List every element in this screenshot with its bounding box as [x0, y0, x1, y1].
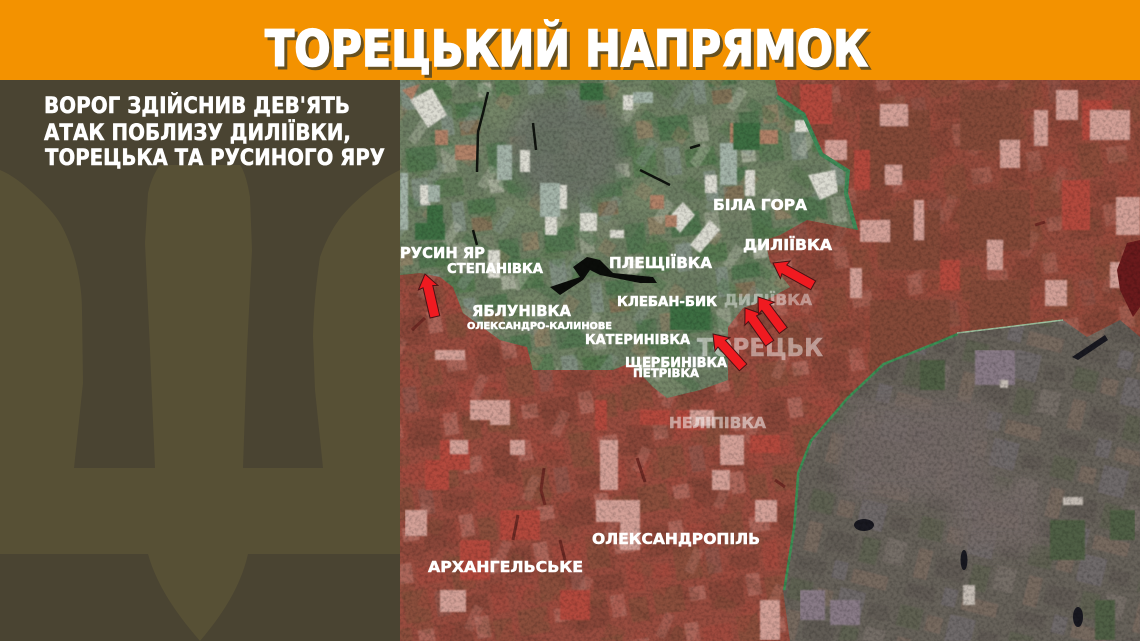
- ponds: [854, 335, 1108, 627]
- text block: attack summary: ВОРОГ ЗДІЙСНИВ ДЕВ'ЯТЬ: [44, 93, 350, 119]
- label: Petrivka: ПЕТРІВКА: [633, 366, 699, 380]
- text block: attack summary: [44, 93, 385, 171]
- arrow: toward Dyliivka: [768, 254, 818, 294]
- urban area: Kostiantynivka: [505, 93, 625, 203]
- label: Dyliivka: ДИЛІЇВКА: [743, 235, 832, 254]
- arrow: Dyliivka south one: [737, 302, 778, 349]
- urban core: [840, 400, 1040, 550]
- label: Arkhanhelske: АРХАНГЕЛЬСЬКЕ: [428, 558, 583, 576]
- label: Nelipivka faded: НЕЛІПІВКА: [669, 414, 766, 432]
- place labels on map: [400, 196, 832, 576]
- panel: left sidebar with trident watermark: [0, 80, 400, 641]
- river lines in red zone: [412, 222, 1045, 560]
- label: Katerynivka: КАТЕРИНІВКА: [585, 333, 690, 348]
- header bar: [0, 0, 1140, 80]
- green boundary strip south-west: [783, 333, 957, 590]
- icon: trident watermark: [0, 165, 400, 641]
- arrow: toward Toretsk: [706, 327, 751, 374]
- lake in red zone: [1117, 240, 1140, 317]
- map zone: Ukrainian-held green territory: [400, 80, 880, 400]
- text block: attack summary: АТАК ПОБЛИЗУ ДИЛІЇВКИ,: [44, 120, 351, 146]
- label: Oleksandropil: ОЛЕКСАНДРОПІЛЬ: [592, 530, 760, 548]
- label: Shcherbynivka: ЩЕРБИНІВКА: [625, 356, 727, 371]
- attack arrows: [415, 254, 818, 374]
- title: ТОРЕЦЬКИЙ НАПРЯМОК: [265, 19, 868, 78]
- brown tint of the north-east sector: [800, 80, 1140, 360]
- label: Toretsk faded: ТОРЕЦЬК: [697, 333, 824, 362]
- creeks: [473, 92, 700, 245]
- label: Dyliivka faded: ДИЛІЇВКА: [724, 290, 812, 309]
- map zone: red occupied territory: [400, 80, 1140, 641]
- arrow: toward Rusyn Yar: [415, 272, 445, 319]
- panel: satellite map: [400, 80, 1140, 641]
- label: Yablunivka: ЯБЛУНІВКА: [472, 302, 571, 320]
- image grain texture: [400, 80, 1140, 641]
- label: Stepanivka: СТЕПАНІВКА: [447, 262, 543, 277]
- map zone: grey occupied urban area: [780, 320, 1140, 641]
- title: ТОРЕЦЬКИЙ НАПРЯМОК: [268, 22, 871, 81]
- label: Pleshchiivka: ПЛЕЩІЇВКА: [609, 253, 712, 272]
- boundary highlight: [957, 320, 1063, 333]
- text block: attack summary: ТОРЕЦЬКА ТА РУСИНОГО ЯРУ: [45, 146, 385, 171]
- label: Rusyn Yar: РУСИН ЯР: [400, 244, 485, 262]
- label: Oleksandro-Kalynove: ОЛЕКСАНДРО-КАЛИНОВЕ: [467, 321, 612, 332]
- label: Kleban-Byk: КЛЕБАН-БИК: [617, 295, 717, 310]
- arrow: Dyliivka south two: [750, 291, 791, 337]
- green boundary strip north-east: [778, 95, 858, 230]
- label: Bila Hora: БІЛА ГОРА: [713, 196, 807, 214]
- reservoir: [550, 257, 657, 295]
